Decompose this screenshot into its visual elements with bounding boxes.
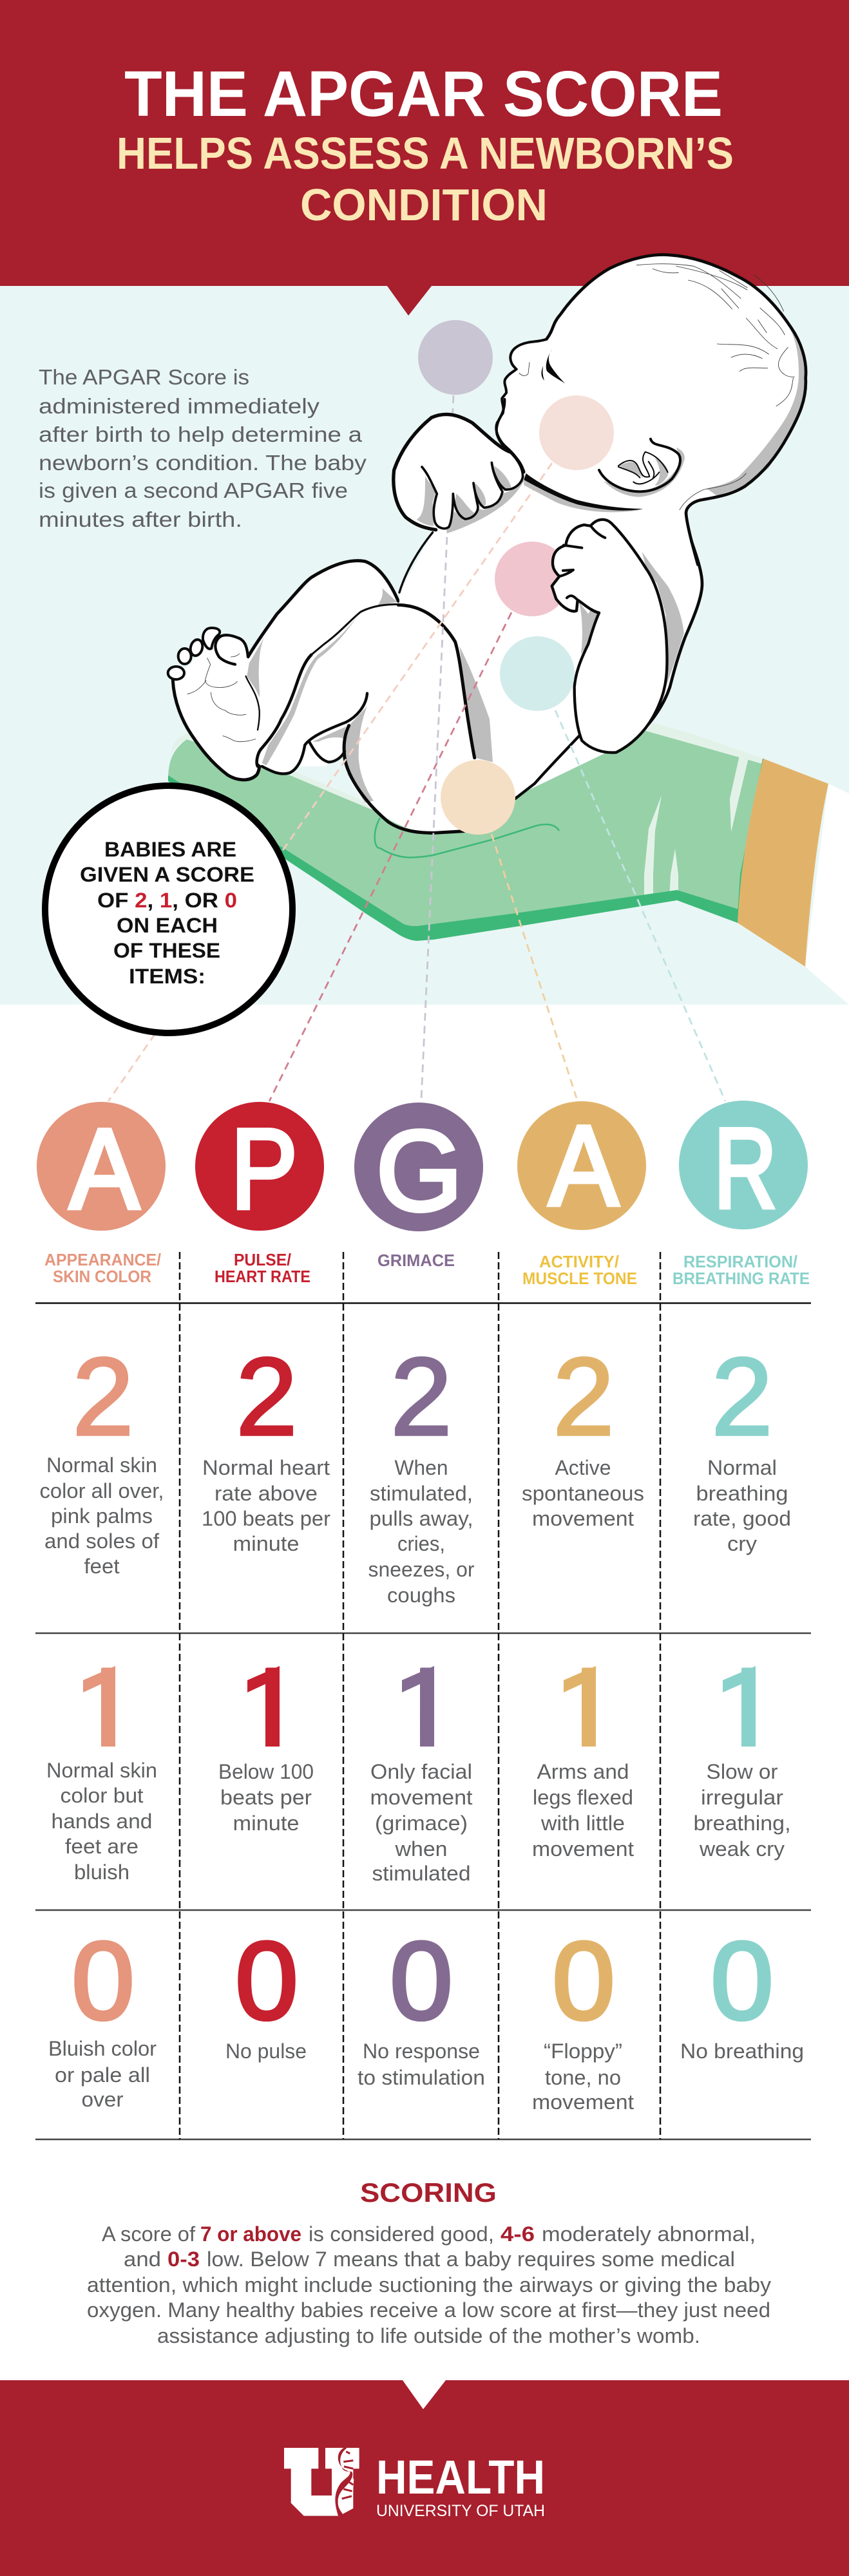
score 1 descriptions: grimace: when — [394, 1837, 447, 1861]
baby: head and torso — [399, 255, 807, 833]
blanket: pale highlights — [170, 723, 765, 903]
score 1 descriptions: respiration: irregular — [701, 1786, 783, 1809]
score 2 descriptions: respiration: rate, good — [693, 1507, 791, 1530]
score 2 numerals — [72, 1335, 773, 1459]
subtitle: CONDITION — [300, 180, 548, 230]
score 2 descriptions: respiration: Normal — [707, 1456, 777, 1479]
score 1 descriptions: grimace: movement — [370, 1786, 473, 1809]
score 0 descriptions: appearance — [48, 2037, 157, 2111]
letter badge: R — [679, 1101, 808, 1232]
score 1 descriptions: pulse: beats per — [220, 1786, 312, 1809]
scoring paragraph: assistance adjusting to life outside of the mother’s womb. — [157, 2324, 700, 2347]
score 1 numerals: 1 — [239, 1643, 303, 1771]
score 1 descriptions: activity: Arms and — [537, 1760, 629, 1783]
score 1 descriptions: grimace: stimulated — [372, 1862, 470, 1885]
score 2 descriptions: pulse — [202, 1456, 330, 1555]
column heading: pulse — [215, 1250, 310, 1286]
score 2 descriptions: appearance: pink palms — [51, 1504, 153, 1528]
intro text: minutes after birth. — [39, 507, 242, 531]
icon: block U with DNA helix — [284, 2447, 359, 2516]
score 1 descriptions: appearance: color but — [61, 1784, 144, 1807]
callout: score bubble: BABIES ARE — [104, 838, 236, 861]
score 1 numerals: 1 — [75, 1643, 138, 1771]
panel: header band — [0, 0, 849, 316]
scoring paragraph: A score of — [102, 2222, 195, 2246]
column heading: appearance — [44, 1250, 161, 1286]
scoring paragraph: oxygen. Many healthy babies receive a low score at first—they just need — [87, 2298, 770, 2322]
logo: University of Utah Health — [284, 2447, 545, 2520]
score 1 numerals: 1 — [715, 1643, 779, 1771]
score 2 descriptions: appearance — [40, 1454, 164, 1578]
score 0 descriptions: appearance: Bluish color — [48, 2037, 157, 2060]
UNIVERSITY OF UTAH wordmark: UNIVERSITY OF UTAH — [376, 2502, 545, 2520]
score 1 descriptions: activity: legs flexed — [533, 1786, 633, 1809]
score 2 descriptions: appearance: color all over, — [40, 1479, 164, 1502]
column heading: pulse: HEART RATE — [215, 1267, 310, 1286]
score 2 descriptions: appearance: feet — [84, 1555, 120, 1578]
blanket: dark green edge — [168, 775, 739, 941]
callout: score bubble: OF 2, 1, OR 0 — [97, 889, 237, 912]
marker: appearance — [539, 395, 614, 470]
score 0 descriptions: activity: “Floppy” — [544, 2040, 622, 2063]
score 1 descriptions: appearance: feet are — [65, 1835, 138, 1858]
scoring paragraph: 0-3 — [167, 2248, 200, 2271]
score 1 descriptions: pulse — [218, 1760, 314, 1835]
column heading: appearance: APPEARANCE/ — [44, 1250, 161, 1269]
letter badge: A — [517, 1101, 646, 1230]
score 2 descriptions: pulse: rate above — [215, 1482, 318, 1505]
score 0 descriptions: respiration: No breathing — [680, 2040, 804, 2063]
callout: score bubble: GIVEN A SCORE — [80, 863, 254, 886]
score 1 descriptions: pulse: Below 100 — [218, 1760, 314, 1783]
shadow along back of head — [707, 309, 805, 496]
intro text: newborn’s condition. The baby — [39, 451, 367, 475]
score 1 descriptions: grimace: Only facial — [370, 1760, 472, 1783]
score 2 descriptions: activity: movement — [532, 1507, 634, 1530]
scoring paragraph: and — [124, 2248, 161, 2271]
scoring paragraph — [87, 2222, 771, 2347]
score 1 descriptions: grimace — [370, 1760, 473, 1885]
callout: score bubble — [45, 786, 292, 1033]
scoring paragraph: low. Below 7 means that a baby requires some medical — [207, 2248, 735, 2271]
baby: fist overlapping pulse marker — [552, 536, 610, 614]
score 0 descriptions: pulse: No pulse — [225, 2040, 307, 2063]
score 2 descriptions: grimace: stimulated, — [370, 1482, 473, 1505]
score 0 descriptions: grimace: to stimulation — [358, 2066, 485, 2089]
subtitle — [117, 128, 734, 230]
eye and nostril — [542, 348, 565, 384]
score 2 descriptions: grimace: coughs — [387, 1584, 455, 1607]
marker: respiration — [500, 636, 575, 711]
column heading: grimace: GRIMACE — [377, 1251, 455, 1270]
score 1 descriptions: appearance: hands and — [52, 1810, 152, 1833]
callout: score bubble: ON EACH — [117, 914, 218, 937]
dashed connector lines — [108, 395, 725, 1101]
score 2 descriptions: respiration: cry — [727, 1532, 757, 1555]
letter badge: A — [37, 1102, 166, 1233]
score 2 descriptions: grimace — [368, 1456, 475, 1607]
HEALTH wordmark: HEALTH — [376, 2450, 545, 2504]
panel: footer band — [0, 2380, 849, 2576]
score 2 numerals: 2 — [553, 1335, 615, 1459]
score 0 descriptions: grimace — [358, 2040, 485, 2089]
head outline — [546, 255, 806, 565]
baby: torso edges — [399, 533, 702, 799]
score 0 numerals: 0 — [235, 1919, 298, 2043]
score 2 descriptions: grimace: pulls away, — [370, 1507, 473, 1530]
score 1 descriptions: activity: movement — [532, 1837, 634, 1861]
blanket: light green cloth — [168, 731, 765, 926]
score 2 numerals: 2 — [236, 1335, 298, 1459]
callout: score bubble: OF THESE — [113, 939, 220, 962]
score 1 descriptions: pulse: minute — [233, 1812, 299, 1835]
score 0 descriptions: appearance: or pale all — [55, 2063, 150, 2087]
score 0 numerals: 0 — [72, 1919, 135, 2043]
score 0 descriptions: grimace: No response — [363, 2040, 480, 2063]
hair lines — [636, 264, 794, 510]
illustration: arm and blanket — [168, 723, 849, 1005]
score 0 numerals: 0 — [390, 1919, 453, 2043]
scoring paragraph: 4-6 — [501, 2222, 535, 2246]
score 1 descriptions: respiration — [693, 1760, 791, 1861]
score 2 descriptions: grimace: sneezes, or — [368, 1558, 475, 1581]
column heading: activity: MUSCLE TONE — [522, 1269, 637, 1288]
column heading: activity — [522, 1252, 637, 1288]
score 2 descriptions: pulse: minute — [233, 1532, 299, 1555]
score 1 numerals: 1 — [394, 1643, 457, 1771]
score 2 descriptions: activity: spontaneous — [522, 1482, 644, 1505]
score 2 descriptions: grimace: When — [394, 1456, 448, 1479]
letter badge: G — [354, 1103, 483, 1235]
ear — [604, 448, 685, 497]
marker: pulse — [495, 542, 569, 616]
score 2 numerals: 2 — [711, 1335, 773, 1459]
arm: white forearm — [805, 784, 849, 1005]
baby: near arm and hand — [394, 399, 643, 533]
panel: light background — [0, 286, 849, 1005]
scoring paragraph: is considered good, — [309, 2222, 494, 2246]
column heading: respiration: BREATHING RATE — [673, 1269, 810, 1288]
score 2 descriptions: appearance: Normal skin — [46, 1454, 157, 1477]
column heading: respiration: RESPIRATION/ — [683, 1252, 797, 1271]
score 2 descriptions: grimace: cries, — [397, 1532, 445, 1555]
scoring heading: SCORING — [360, 2177, 497, 2208]
score 0 descriptions: appearance: over — [81, 2088, 124, 2111]
score 2 descriptions: activity: Active — [555, 1456, 611, 1479]
table grid — [35, 1252, 811, 2139]
score 1 numerals: 1 — [555, 1643, 619, 1771]
scoring paragraph: moderately abnormal, — [542, 2222, 756, 2246]
column heading: respiration — [673, 1252, 810, 1288]
marker: grimace — [418, 320, 493, 395]
intro text — [39, 365, 367, 531]
column heading: pulse: PULSE/ — [234, 1250, 291, 1269]
column heading: appearance: SKIN COLOR — [53, 1267, 151, 1286]
letter badge: A: A — [549, 1102, 618, 1229]
letter badge: G: G — [376, 1107, 463, 1235]
title: THE APGAR SCORE — [124, 58, 723, 130]
score 1 descriptions: respiration: weak cry — [699, 1837, 785, 1861]
score 2 descriptions: pulse: 100 beats per — [202, 1507, 330, 1530]
score 2 numerals: 2 — [390, 1335, 452, 1459]
letter badge: P: P — [231, 1105, 298, 1233]
score 1 descriptions: respiration: breathing, — [693, 1812, 791, 1835]
arm: orange sleeve — [738, 759, 828, 967]
score 0 descriptions: activity: movement — [532, 2090, 634, 2114]
score 1 descriptions: appearance — [46, 1759, 157, 1884]
score 1 descriptions: appearance: bluish — [74, 1861, 129, 1884]
letter badge: R: R — [714, 1104, 777, 1232]
score 2 descriptions: respiration — [693, 1456, 791, 1555]
intro text: is given a second APGAR five — [39, 478, 348, 502]
baby: front leg — [256, 604, 493, 834]
column heading: activity: ACTIVITY/ — [539, 1252, 619, 1271]
score 1 descriptions: appearance: Normal skin — [46, 1759, 157, 1782]
score 0 numerals: 0 — [552, 1919, 615, 2043]
letter badge: P — [195, 1102, 324, 1233]
score 1 descriptions: respiration: Slow or — [706, 1760, 778, 1783]
score 0 descriptions: activity: tone, no — [545, 2066, 621, 2089]
score 1 numerals — [83, 1666, 756, 1747]
score 2 descriptions: respiration: breathing — [696, 1482, 788, 1505]
score 0 numerals — [72, 1919, 774, 2043]
score 0 descriptions: activity — [532, 2040, 634, 2114]
score 2 numerals: 2 — [72, 1335, 134, 1459]
face profile — [497, 339, 546, 472]
letter badge: A: A — [70, 1105, 139, 1233]
scoring paragraph: attention, which might include suctioning the airways or giving the baby — [87, 2273, 771, 2297]
score 1 descriptions: grimace: (grimace) — [375, 1812, 468, 1835]
subtitle: HELPS ASSESS A NEWBORN’S — [117, 128, 734, 178]
score 2 descriptions: activity — [522, 1456, 644, 1530]
intro text: The APGAR Score is — [39, 365, 249, 389]
baby: far arm and fist — [552, 520, 684, 753]
score 2 descriptions: pulse: Normal heart — [202, 1456, 330, 1479]
score 1 descriptions: activity — [532, 1760, 634, 1861]
score 0 numerals: 0 — [711, 1919, 774, 2043]
baby: back leg and foot — [168, 560, 398, 780]
scoring paragraph: 7 or above — [200, 2222, 301, 2246]
intro text: after birth to help determine a — [39, 422, 363, 446]
intro text: administered immediately — [39, 394, 320, 418]
score 1 descriptions: activity: with little — [540, 1812, 625, 1835]
score 2 descriptions: appearance: and soles of — [44, 1530, 159, 1553]
blanket: fold line — [375, 818, 559, 857]
callout: score bubble: ITEMS: — [129, 965, 205, 988]
marker: activity — [441, 760, 515, 835]
